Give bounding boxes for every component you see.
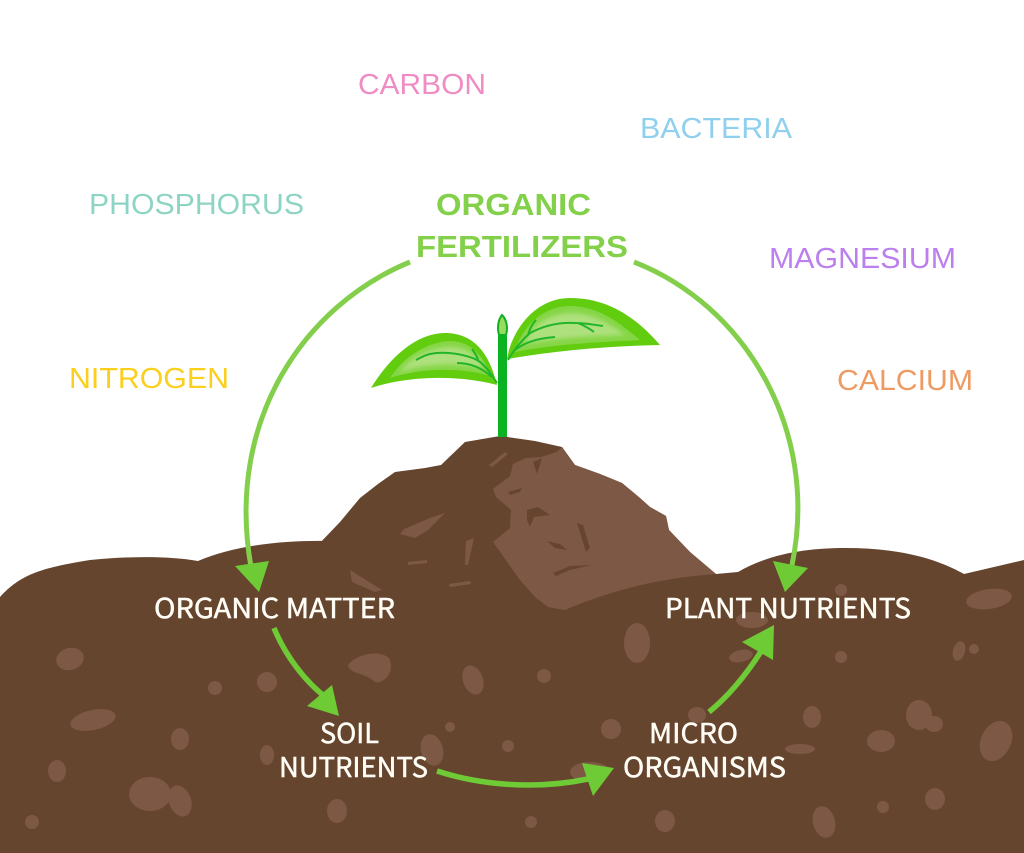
label: plant nutrients: PLANT NUTRIENTS [665,587,911,626]
bud [498,315,507,335]
label: bacteria: BACTERIA [640,113,793,145]
soil specks [25,584,1018,840]
label: magnesium: MAGNESIUM [769,243,956,275]
arrow: soil nutrients to micro organisms [437,763,614,796]
nutrient labels [69,69,973,397]
label: micro organisms [623,712,786,785]
stem [498,336,507,437]
label: calcium: CALCIUM [837,365,973,397]
label: nitrogen: NITROGEN [69,363,229,395]
arrow: fertilizers to plant nutrients [634,262,808,592]
plant seedling [371,298,660,437]
heading: organic fertilizers: ORGANIC [436,187,591,222]
mound light flecks [350,452,508,592]
mound dark cracks [508,458,592,576]
label: carbon: CARBON [358,69,486,101]
label: micro organisms: ORGANISMS [623,746,786,785]
label: organic matter: ORGANIC MATTER [154,587,395,626]
mound highlight [493,447,716,610]
label: soil nutrients: NUTRIENTS [279,746,428,785]
left leaf [371,333,497,388]
label: phosphorus: PHOSPHORUS [89,189,304,221]
heading: organic fertilizers: FERTILIZERS [416,229,628,264]
right leaf [507,298,660,360]
soil mound [318,436,716,620]
soil ground [0,452,1024,853]
heading: organic fertilizers [416,187,628,264]
arrow: micro organisms to plant nutrients [709,625,774,712]
arrow: fertilizers to organic matter [235,262,410,592]
label: micro organisms: MICRO [649,712,738,751]
arrow: organic matter to soil nutrients [274,628,339,716]
label: soil nutrients: SOIL [320,712,379,751]
label: soil nutrients [279,712,428,785]
